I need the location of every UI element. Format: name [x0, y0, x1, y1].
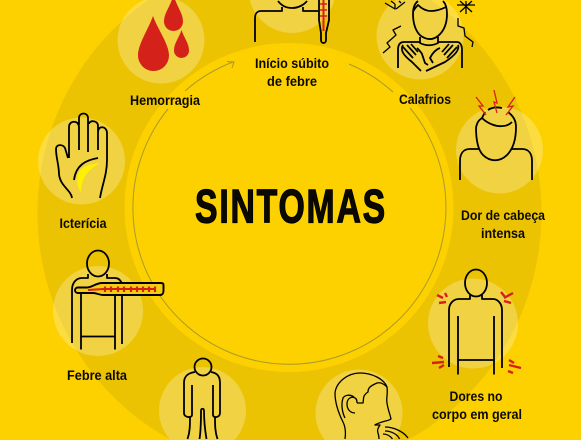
- symptom: dor de cabeça: [456, 90, 545, 241]
- icon: blood drops: [138, 0, 189, 71]
- icon: hand: [56, 114, 107, 198]
- symptom: dores no corpo: Dores no: [450, 388, 502, 404]
- symptom: início súbito de febre: Início súbito: [255, 55, 329, 71]
- symptom: dores no corpo: [428, 270, 522, 422]
- symptom: início súbito de febre: de febre: [267, 73, 317, 89]
- icon: person with pain marks: [432, 270, 521, 374]
- central circle: [124, 43, 454, 372]
- title: SINTOMAS: [195, 180, 387, 232]
- circular arrow: [133, 62, 446, 364]
- icon: person shivering: [383, 1, 475, 71]
- symptom: febre alta: Febre alta: [67, 367, 127, 383]
- icon: head with lightning: [460, 90, 532, 180]
- icon: person with thermometer: [255, 0, 329, 43]
- icon: standing person: [184, 358, 220, 439]
- symptom: dor de cabeça: intensa: [481, 225, 525, 241]
- symptom: calafrios: [376, 0, 475, 107]
- icon: person with thermometer: [72, 250, 164, 350]
- symptom: febre alta: [53, 250, 164, 383]
- icon: head coughing: [335, 373, 408, 439]
- symptom: calafrios: Calafrios: [399, 91, 451, 107]
- symptom: icterícia: [38, 114, 125, 231]
- symptom: tosse: [316, 369, 408, 440]
- symptom: icterícia: Icterícia: [60, 215, 107, 231]
- symptom: hemorragia: Hemorragia: [130, 92, 200, 108]
- symptom: body: [159, 358, 246, 440]
- symptom: início súbito de febre: [250, 0, 334, 89]
- symptom: dores no corpo: corpo em geral: [432, 406, 522, 422]
- symptom: hemorragia: [118, 0, 204, 108]
- symptom: dor de cabeça: Dor de cabeça: [461, 207, 545, 223]
